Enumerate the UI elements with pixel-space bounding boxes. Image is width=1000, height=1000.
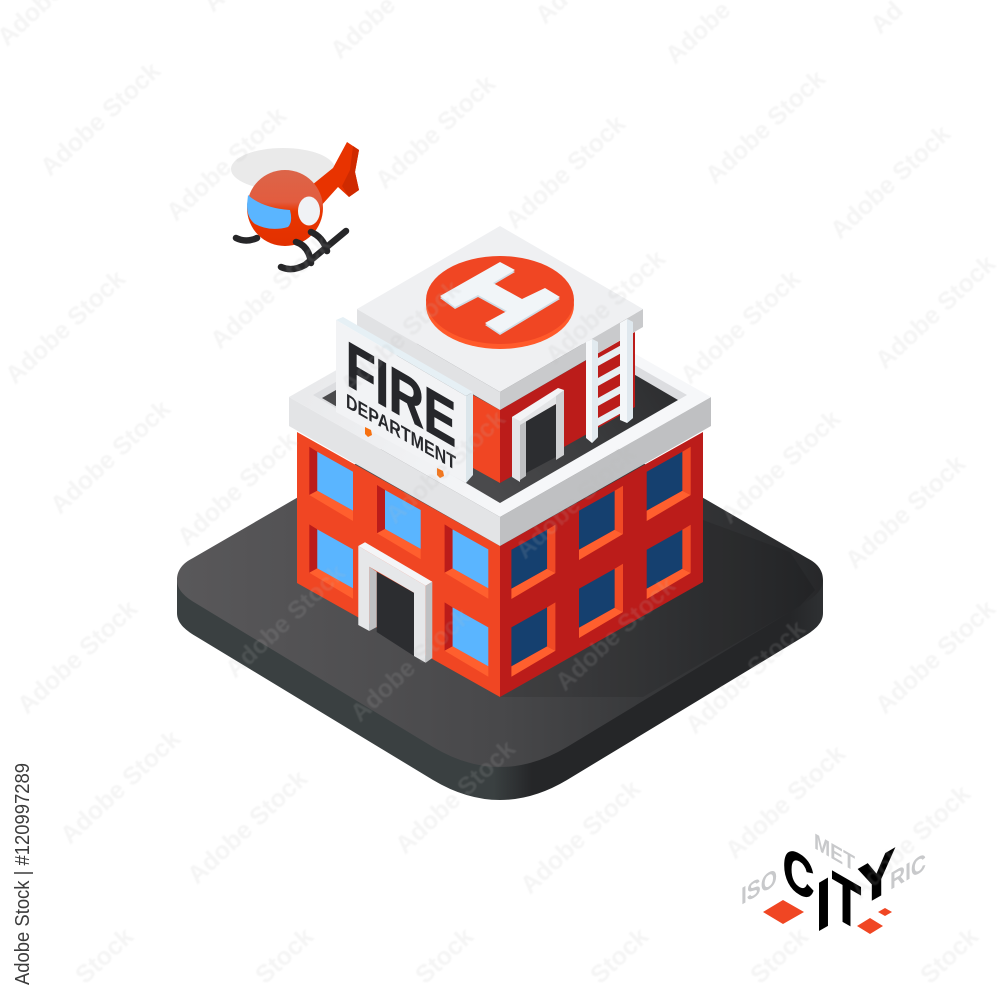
watermark: Adobe Stock — [675, 265, 806, 389]
watermark: Adobe Stock — [205, 230, 336, 354]
watermark: Adobe Stock — [700, 65, 831, 189]
watermark: Adobe Stock — [220, 559, 351, 683]
right wall windows — [511, 447, 691, 677]
watermark: Adobe Stock — [380, 405, 511, 529]
H letter marking — [440, 262, 560, 335]
sign text: FIRE: FIRE — [346, 328, 456, 461]
sign text: DEPARTMENT: DEPARTMENT — [346, 388, 456, 475]
entrance door — [358, 542, 432, 663]
watermark: Stock — [915, 922, 984, 989]
logo: CITY: T — [832, 857, 861, 946]
side credit: Adobe Stock | #120997289 — [12, 763, 34, 985]
fuselage — [247, 170, 323, 246]
logo: MET: MET — [814, 829, 855, 877]
upper door — [512, 388, 564, 482]
left wall windows — [309, 447, 488, 677]
watermark: Adobe Stock — [0, 265, 131, 389]
helicopter — [231, 142, 359, 269]
watermark: Stock — [585, 922, 654, 989]
left wall — [297, 432, 500, 697]
watermark: Stock — [745, 922, 814, 989]
watermark: Adobe Stock — [390, 735, 521, 859]
rotor — [231, 148, 335, 190]
watermark: Adobe Stock — [870, 595, 1000, 719]
watermark: Adobe Stock — [55, 725, 186, 849]
watermark: Adobe Stock — [870, 250, 1000, 374]
watermark: Adobe Stock — [172, 427, 303, 551]
helipad — [426, 256, 574, 349]
logo: CITY: I — [816, 862, 831, 947]
canopy — [247, 195, 291, 229]
tail — [312, 142, 359, 207]
logo: CITY: Y — [858, 836, 895, 920]
watermark: Adobe Stock — [715, 405, 846, 529]
roof parapet — [289, 277, 711, 546]
logo: CITY — [783, 833, 895, 947]
sign lights — [365, 427, 444, 478]
watermark: Adobe Stock — [720, 740, 851, 864]
skids — [236, 231, 346, 269]
watermark: Adobe Stock — [500, 110, 631, 234]
watermark: Adobe Stock — [550, 572, 681, 696]
watermark: Adobe Stock — [45, 395, 176, 519]
watermark: Adobe Stock — [345, 603, 476, 727]
roof slab — [357, 226, 643, 410]
watermark: Adobe Stock — [515, 775, 646, 899]
watermark: Stock — [250, 922, 319, 989]
watermark: Adobe Stock — [35, 57, 166, 181]
watermark: Adobe Stock — [335, 275, 466, 399]
isometric base platform — [177, 400, 823, 800]
right wall — [500, 432, 703, 697]
logo: CITY: C — [783, 833, 814, 914]
watermark: Adobe Stock — [825, 120, 956, 244]
rooftop sign — [336, 317, 473, 483]
watermark: Adobe Stock — [540, 245, 671, 369]
watermark: Adobe Stock — [182, 765, 313, 889]
upper block walls — [473, 332, 635, 483]
watermark: Adobe Stock — [12, 595, 143, 719]
side window — [298, 196, 320, 226]
watermark: Stock — [410, 922, 479, 989]
roof ladder — [586, 319, 633, 443]
watermark: Stock — [70, 922, 139, 989]
fire station building — [289, 226, 711, 697]
watermark: Adobe Stock — [680, 615, 811, 739]
logo: ISO: ISO — [741, 864, 777, 911]
watermark: Adobe Stock — [161, 102, 292, 226]
logo: RIC: RIC — [890, 849, 926, 896]
watermark: Adobe Stock — [840, 450, 971, 574]
watermark: Adobe Stock — [370, 70, 501, 194]
logo diamonds — [763, 900, 892, 934]
logo: Isometric City — [741, 829, 926, 947]
watermark: Adobe Stock — [845, 780, 976, 904]
watermark: Adobe Stock — [510, 440, 641, 564]
